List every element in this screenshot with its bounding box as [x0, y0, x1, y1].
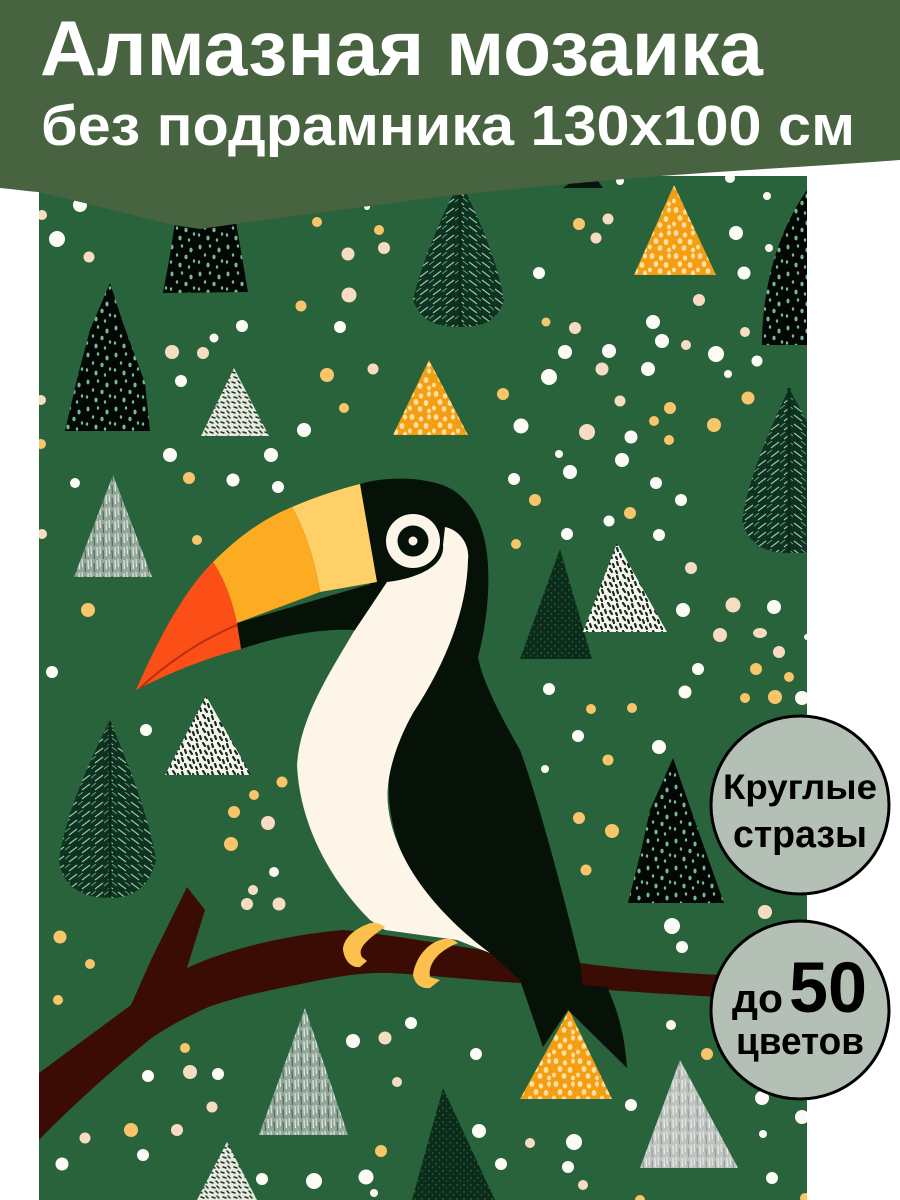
- snow dots: white: [46, 173, 810, 1197]
- badge: up to 50 colours: цветов: [736, 1021, 864, 1063]
- fir tree left: [59, 720, 156, 898]
- dark green triangles: [412, 549, 592, 1200]
- white chest: [297, 527, 490, 953]
- branch: [39, 887, 740, 1140]
- toucan claws: [343, 923, 458, 988]
- badge: round rhinestones: стразы: [733, 814, 867, 856]
- badge: round rhinestones: Круглые: [723, 768, 877, 807]
- black body, head and tail: [360, 479, 627, 1068]
- grey hatched triangles: [74, 475, 738, 1168]
- beak yellow section: [292, 484, 377, 592]
- hidden dark tree tip: [563, 181, 603, 188]
- toucan: [136, 479, 627, 1068]
- snow dots: cream: [36, 210, 785, 1190]
- gold triangles: [393, 185, 716, 1099]
- dark tree lower right: [628, 758, 724, 903]
- dark triangle tree top left: [163, 222, 248, 293]
- fir tree top centre: [413, 180, 504, 327]
- eye: [386, 514, 440, 568]
- lower beak black: [237, 584, 372, 649]
- badge: up to 50 colours: [711, 921, 889, 1099]
- badge: up to 50 colours: до: [732, 977, 783, 1021]
- fir tree right: [742, 388, 810, 553]
- dark triangle tree left: [65, 283, 150, 431]
- badge: up to 50 colours: 50: [789, 949, 867, 1028]
- beak red groove: [140, 625, 237, 688]
- dark tree at right edge: [762, 190, 807, 345]
- beak red tip: [136, 562, 241, 690]
- badge: round rhinestones: [711, 716, 889, 894]
- green background: [39, 176, 807, 1200]
- beak orange section: [213, 507, 320, 623]
- title: Алмазная мозаика: [40, 4, 764, 92]
- snow dots: gold: [36, 217, 810, 1200]
- white speckled triangles: [165, 368, 667, 1200]
- subtitle: без подрамника 130х100 см: [41, 94, 855, 158]
- header banner: [0, 0, 900, 229]
- panel: green artwork: [36, 173, 810, 1200]
